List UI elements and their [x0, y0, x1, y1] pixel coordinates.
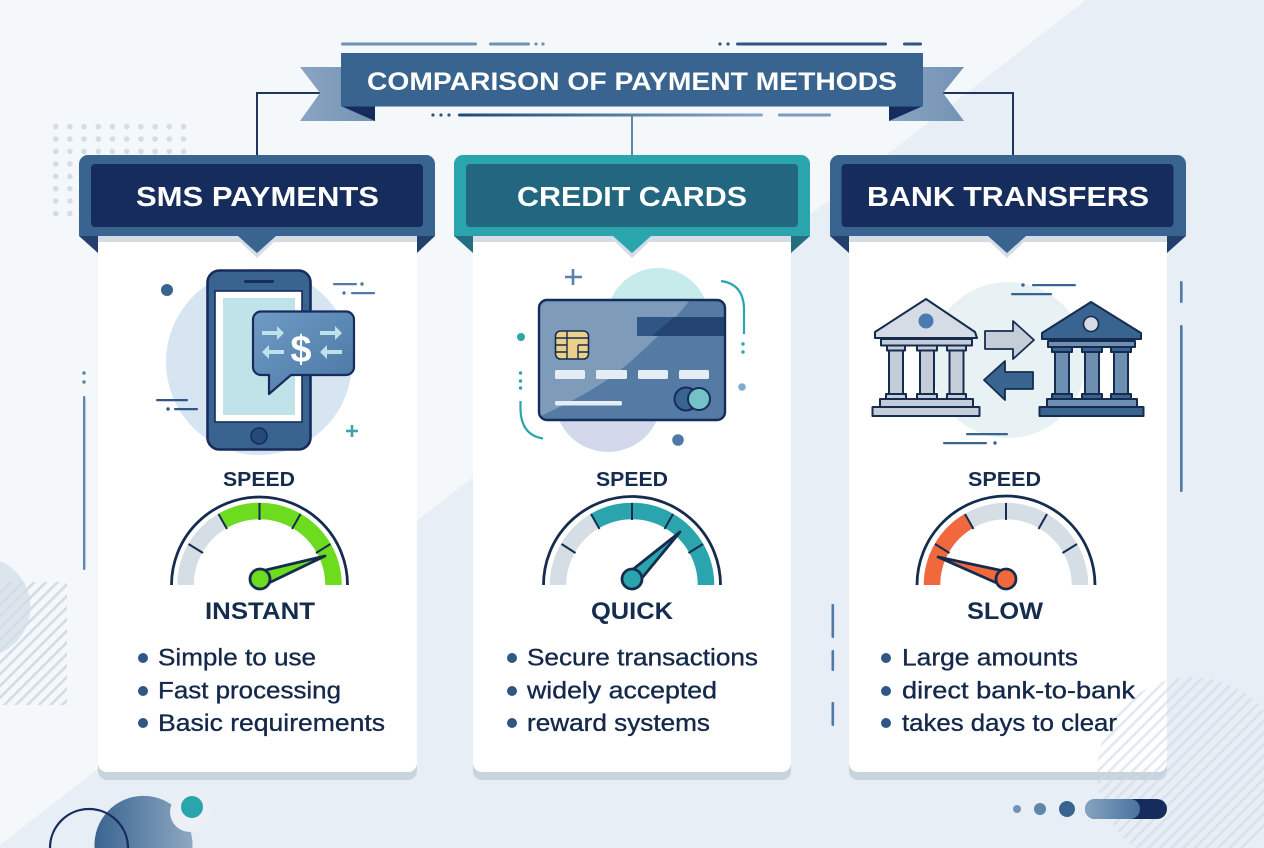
middle side accent lines [832, 604, 834, 726]
heading: SMS Payments: SMS PAYMENTS [136, 181, 379, 212]
status: quick: QUICK [591, 598, 674, 625]
list: bank features: direct bank-to-bank [902, 678, 1136, 704]
panel: credit cards [454, 155, 810, 780]
list: bank features: Large amounts [902, 644, 1078, 672]
icon: left bank [872, 299, 980, 416]
list: SMS features: Basic requirements [158, 710, 385, 737]
list: card features: Secure transactions [527, 644, 758, 672]
gauge: quick [544, 496, 720, 589]
list: bank features: takes days to clear [902, 710, 1117, 737]
label: speed: SPEED [968, 469, 1041, 491]
list: card features: reward systems [527, 710, 710, 737]
left side accent line [82, 371, 86, 570]
icon: phone with SMS payment bubble: $ [290, 329, 312, 371]
bottom left circles [50, 792, 210, 848]
list: SMS features: Fast processing [158, 678, 341, 704]
heading: Credit Cards: CREDIT CARDS [517, 181, 747, 212]
title banner [300, 53, 964, 121]
right side accent lines [1180, 281, 1183, 492]
list: card features: widely accepted [526, 678, 717, 704]
panel: bank transfers [830, 155, 1264, 848]
icon: arrow right [985, 321, 1034, 359]
gauge: slow [917, 496, 1095, 589]
heading: Bank Transfers: BANK TRANSFERS [867, 181, 1149, 212]
bottom right hatch circle [1097, 677, 1264, 848]
label: speed: SPEED [596, 469, 668, 491]
list: bank features [881, 644, 1136, 737]
title text: COMPARISON OF PAYMENT METHODS [367, 68, 897, 96]
status: slow: SLOW [967, 598, 1043, 625]
left decoration: circle and hatch [0, 561, 67, 705]
decorative dot grid [53, 124, 186, 216]
title decoration lines [341, 42, 922, 117]
list: SMS features [138, 644, 385, 737]
icon: right bank [1040, 302, 1144, 416]
list: SMS features: Simple to use [158, 644, 316, 672]
connector lines [257, 93, 1013, 155]
icon: two banks exchanging [872, 282, 1144, 445]
status: instant: INSTANT [205, 598, 315, 625]
list: card features [507, 644, 758, 737]
panel: SMS payments [79, 155, 435, 780]
icon: arrow left [984, 361, 1033, 400]
icon: credit card [517, 268, 746, 452]
bottom right pagination [1013, 799, 1167, 819]
icon: phone with SMS payment bubble [156, 269, 375, 455]
gauge: instant [172, 497, 348, 589]
label: speed: SPEED [223, 469, 295, 491]
